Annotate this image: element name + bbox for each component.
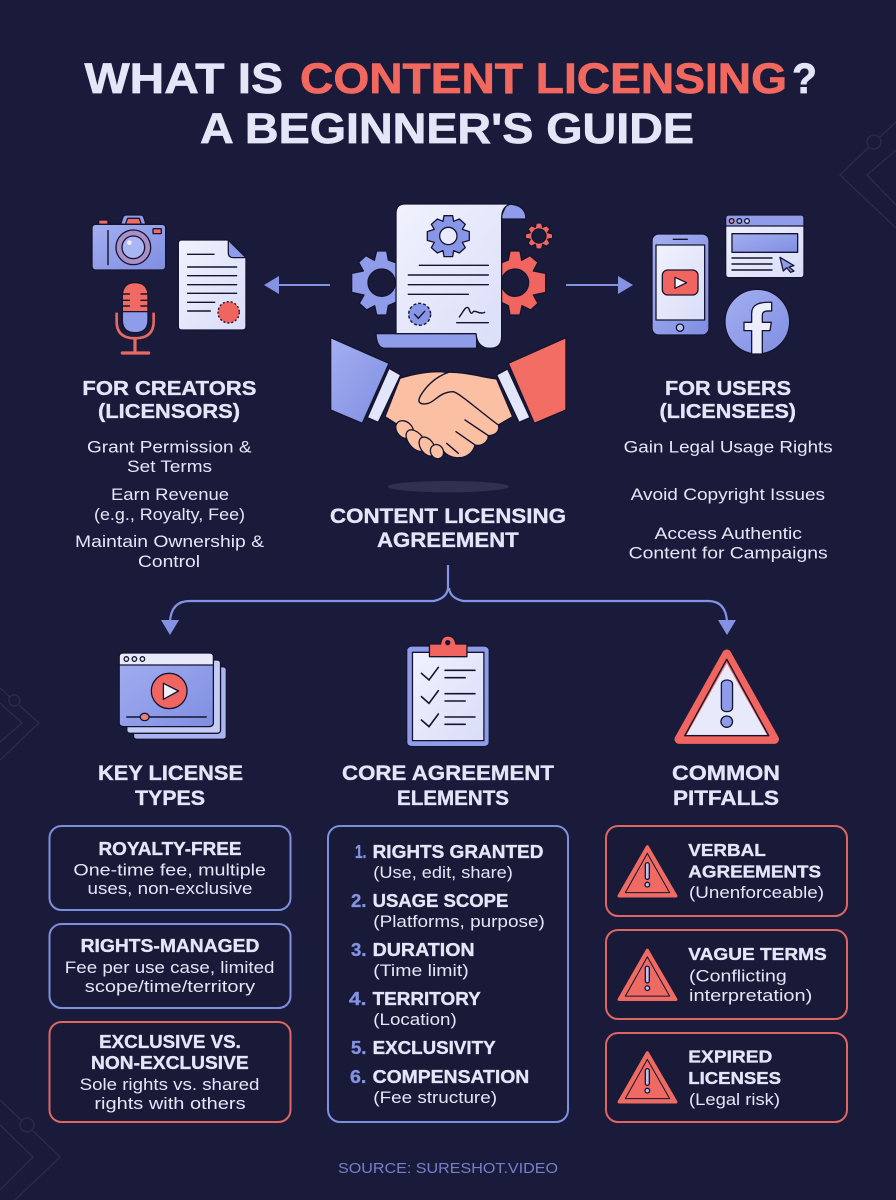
icon: facebook circle	[725, 289, 790, 354]
arrow: branching connector	[161, 565, 736, 635]
panel: core agreement elements	[328, 826, 568, 1122]
item 1: rights granted: RIGHTS GRANTED	[373, 842, 543, 862]
item 4: territory: 4.	[349, 989, 366, 1009]
panel: expired licenses: LICENSES	[688, 1068, 781, 1088]
heading: content licensing agreement	[330, 505, 566, 552]
item 3: duration	[351, 940, 475, 980]
text: creator benefits: Set Terms	[127, 458, 212, 476]
item 2: usage scope: (Platforms, purpose)	[373, 913, 545, 931]
title: WHAT IS	[84, 55, 283, 103]
icon: microphone	[117, 283, 154, 353]
item 6: compensation: 6.	[350, 1067, 366, 1087]
panel: vague terms: (Conflicting	[689, 968, 787, 986]
panel: royalty-free: uses, non-exclusive	[88, 880, 252, 898]
heading: key license types: TYPES	[135, 787, 205, 810]
heading: for creators: (LICENSORS)	[98, 400, 240, 423]
icon: camera	[92, 215, 166, 270]
heading: for creators: FOR CREATORS	[82, 377, 256, 400]
icon: left cuff	[367, 368, 401, 422]
item 6: compensation	[350, 1067, 529, 1107]
panel: exclusive vs non-exclusive: Sole rights vs. shared	[80, 1076, 259, 1094]
panel: vague terms: interpretation)	[689, 987, 812, 1005]
item 1: rights granted: 1.	[355, 842, 366, 862]
heading: for creators	[82, 377, 256, 423]
panel: verbal agreements: AGREEMENTS	[688, 861, 821, 881]
text: creator benefits: Earn Revenue	[111, 486, 229, 504]
panel: rights-managed: RIGHTS-MANAGED	[81, 936, 259, 956]
heading: content licensing agreement: AGREEMENT	[377, 529, 519, 552]
text: user benefits: Content for Campaigns	[629, 544, 828, 562]
icon: video windows	[119, 653, 226, 739]
item 4: territory: TERRITORY	[373, 989, 481, 1009]
panel: royalty-free	[50, 826, 290, 910]
icon: shaking hands	[385, 372, 513, 461]
item 3: duration: (Time limit)	[373, 962, 469, 980]
item 2: usage scope	[351, 891, 545, 931]
heading: content licensing agreement: CONTENT LICENSING	[330, 505, 566, 528]
icon: warning triangle	[679, 654, 775, 739]
item 3: duration: DURATION	[373, 940, 475, 960]
panel: verbal agreements	[606, 826, 847, 916]
item 5: exclusivity: 5.	[351, 1038, 366, 1058]
text: creator benefits	[75, 438, 264, 571]
text: user benefits: Gain Legal Usage Rights	[624, 438, 833, 456]
heading: common pitfalls: PITFALLS	[673, 787, 779, 810]
panel: royalty-free: ROYALTY-FREE	[98, 839, 242, 859]
arrow: to creators	[264, 276, 330, 294]
icon: phone with play button	[652, 234, 709, 335]
item 3: duration: 3.	[351, 940, 366, 960]
icon: right cuff	[497, 369, 530, 422]
icon: left sleeve	[331, 338, 389, 423]
icon: user platforms	[652, 215, 804, 354]
panel: vague terms: VAGUE TERMS	[688, 944, 827, 964]
text: creator benefits: Grant Permission &	[87, 438, 252, 456]
item 6: compensation: (Fee structure)	[373, 1089, 497, 1107]
source line: SOURCE: SURESHOT.VIDEO	[338, 1161, 558, 1177]
panel: exclusive vs non-exclusive: rights with others	[94, 1095, 246, 1113]
panel: rights-managed	[50, 924, 290, 1008]
text: user benefits	[624, 438, 833, 562]
item 6: compensation: COMPENSATION	[373, 1067, 529, 1087]
panel: exclusive vs non-exclusive	[50, 1022, 290, 1122]
title: A BEGINNER'S GUIDE	[200, 105, 694, 153]
text: creator benefits: Maintain Ownership &	[75, 533, 264, 551]
panel: rights-managed: Fee per use case, limited	[65, 959, 274, 977]
heading: key license types	[98, 762, 243, 810]
item 1: rights granted: (Use, edit, share)	[373, 864, 513, 882]
icon: small warning	[619, 1053, 676, 1102]
icon: clipboard checklist	[407, 636, 489, 747]
panel: expired licenses: EXPIRED	[688, 1047, 772, 1067]
panel: verbal agreements: VERBAL	[688, 840, 766, 860]
icon: browser window	[726, 215, 804, 278]
heading: for users: (LICENSEES)	[660, 400, 796, 423]
icon: small warning	[619, 950, 676, 999]
item 5: exclusivity: EXCLUSIVITY	[373, 1038, 496, 1058]
panel: expired licenses	[606, 1033, 847, 1122]
item 2: usage scope: USAGE SCOPE	[373, 891, 508, 911]
heading: common pitfalls: COMMON	[672, 762, 780, 785]
panel: rights-managed: scope/time/territory	[85, 978, 256, 996]
item 4: territory	[349, 989, 481, 1029]
icon: small warning	[619, 847, 676, 896]
panel: royalty-free: One-time fee, multiple	[73, 862, 266, 880]
icon: contract and handshake	[331, 204, 566, 492]
heading: core agreement elements: CORE AGREEMENT	[342, 762, 554, 785]
title: ?	[792, 55, 817, 103]
icon: right sleeve	[508, 338, 566, 423]
heading: for users: FOR USERS	[665, 377, 791, 400]
panel: verbal agreements: (Unenforceable)	[689, 884, 824, 902]
heading: common pitfalls	[672, 762, 780, 810]
heading: core agreement elements	[342, 762, 554, 810]
icon: scroll document	[376, 204, 526, 348]
text: user benefits: Access Authentic	[654, 525, 802, 543]
item 4: territory: (Location)	[373, 1011, 457, 1029]
panel: expired licenses: (Legal risk)	[689, 1091, 780, 1109]
title: CONTENT LICENSING	[300, 55, 787, 103]
panel: exclusive vs non-exclusive: EXCLUSIVE VS.	[99, 1032, 241, 1052]
item 2: usage scope: 2.	[351, 891, 366, 911]
icon: gears	[352, 223, 553, 315]
shadow ellipse	[388, 481, 509, 492]
heading: key license types: KEY LICENSE	[98, 762, 243, 785]
text: creator benefits: (e.g., Royalty, Fee)	[94, 506, 245, 524]
title	[84, 55, 817, 153]
item 1: rights granted	[355, 842, 543, 882]
heading: core agreement elements: ELEMENTS	[397, 787, 509, 810]
text: user benefits: Avoid Copyright Issues	[631, 486, 825, 504]
text: creator benefits: Control	[138, 553, 200, 571]
icon: document with seal	[178, 240, 246, 330]
arrow: to users	[566, 276, 633, 294]
panel: vague terms	[606, 930, 847, 1019]
panel: exclusive vs non-exclusive: NON-EXCLUSIVE	[91, 1053, 249, 1073]
heading: for users	[660, 377, 796, 423]
icon: creator tools	[92, 215, 246, 353]
